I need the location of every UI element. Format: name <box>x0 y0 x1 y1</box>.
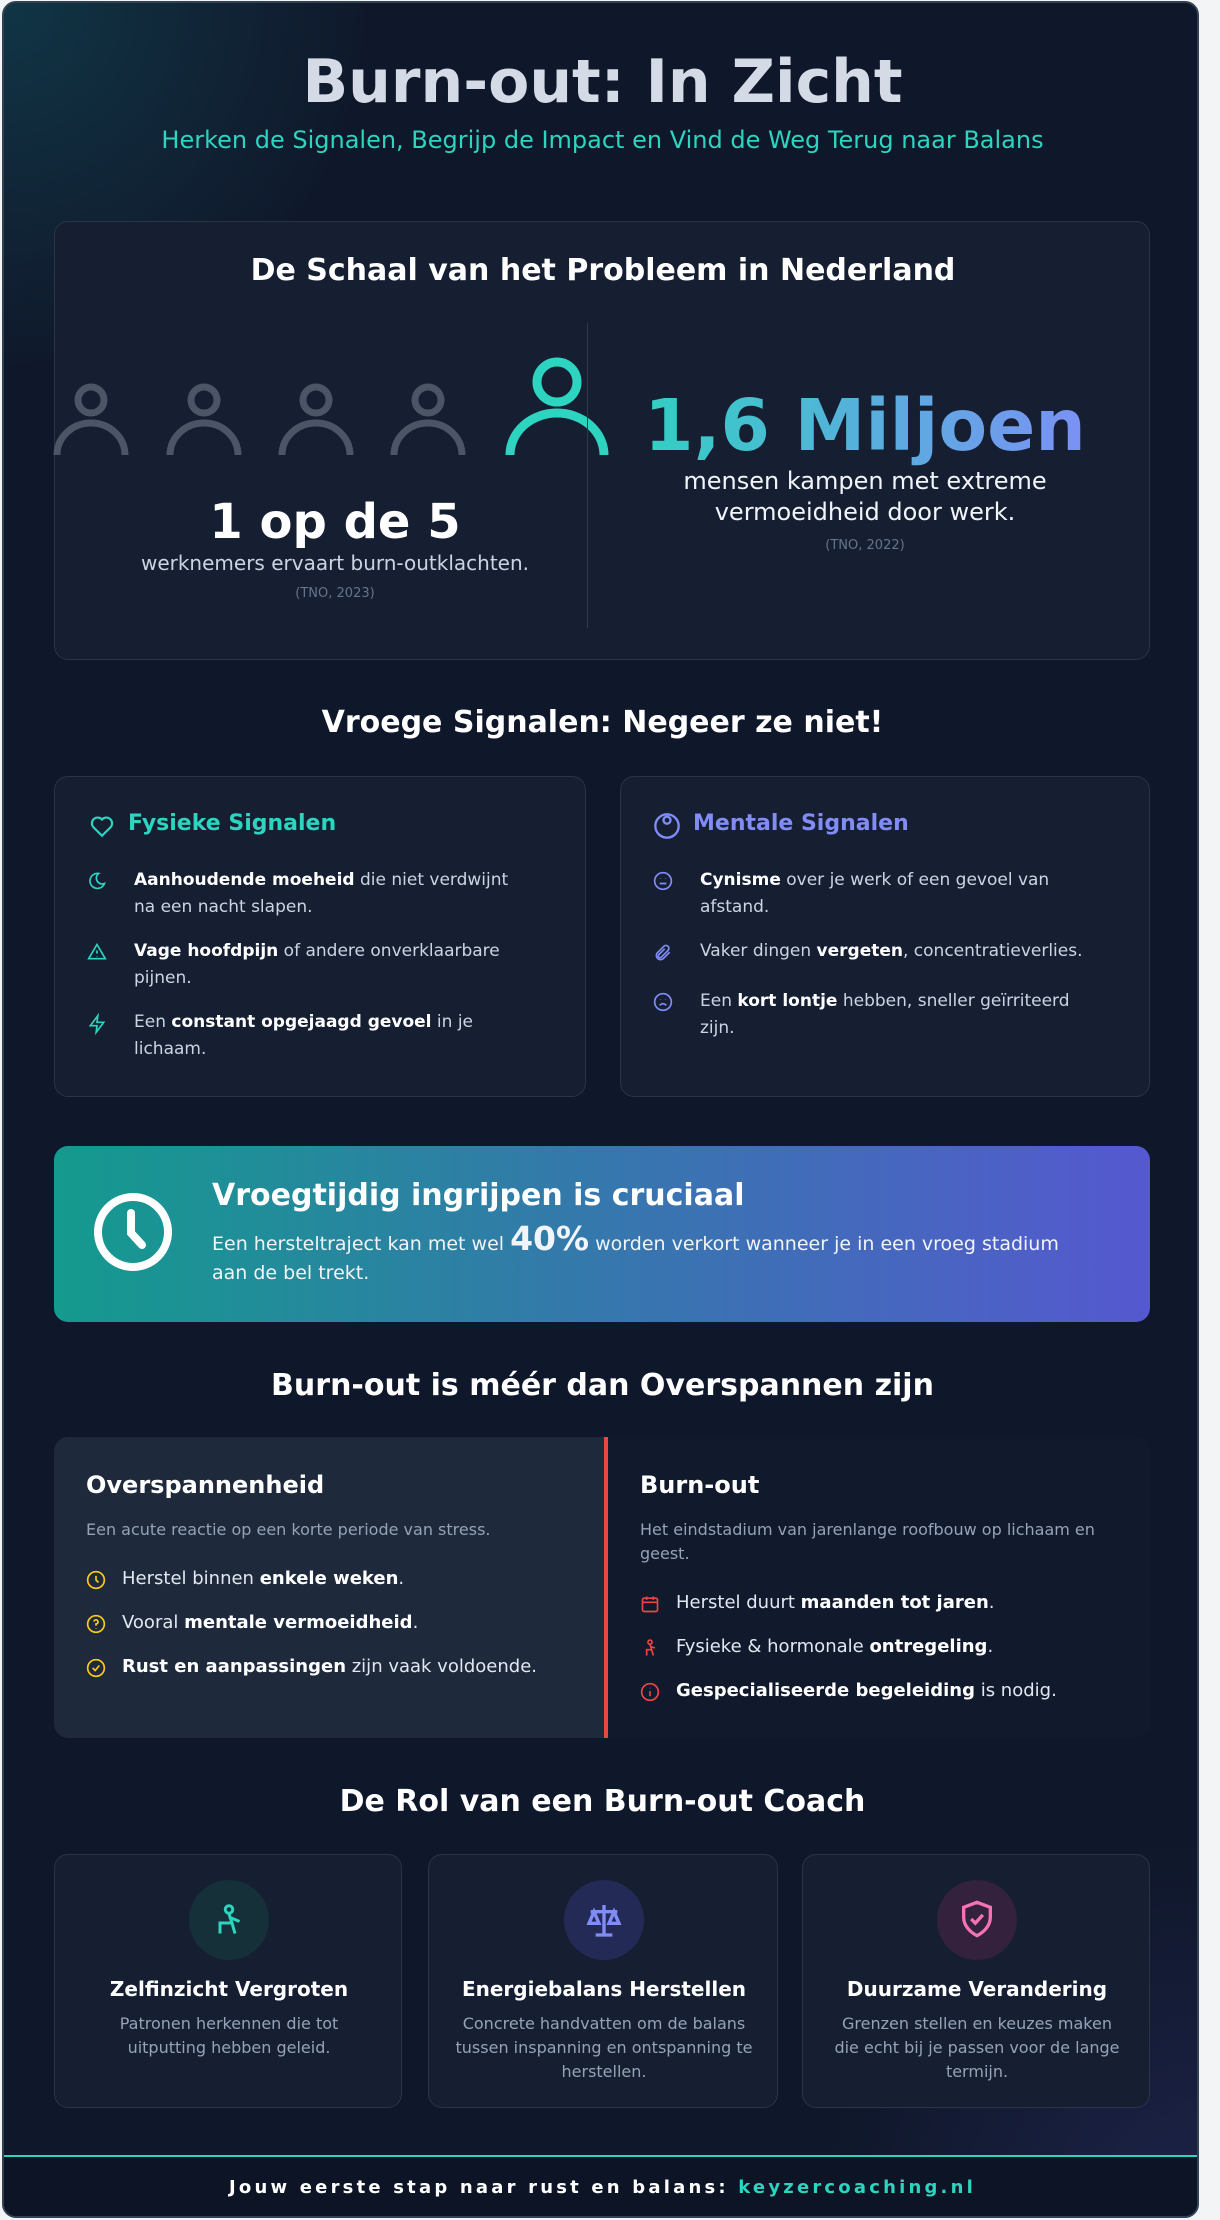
panel: fysieke signalen <box>54 776 586 1097</box>
header mentaal: Mentale Signalen <box>693 811 909 836</box>
stat: 1,6 Miljoen: vermoeidheid door werk. <box>715 498 1015 526</box>
footer <box>4 2155 1201 2220</box>
desc burn-out: Het eindstadium van jarenlange roofbouw op lichaam en geest. <box>640 1520 1095 1563</box>
stat: 1,6 Miljoen <box>644 384 1086 553</box>
item mentale: Vooral mentale vermoeidheid. <box>122 1612 418 1633</box>
stat: 1 op de 5 <box>141 494 529 601</box>
item vergeten: Vaker dingen vergeten, concentratieverlies. <box>700 941 1083 961</box>
icon: shield <box>937 1880 1017 1960</box>
banner text: Een hersteltraject kan met wel 40% worden verkort wanneer je in een vroeg stadium aan de bel trekt. <box>212 1219 1059 1284</box>
heading: vroege signalen: Vroege Signalen: Negeer ze niet! <box>322 705 883 740</box>
card: zelfinzicht <box>54 1854 402 2108</box>
item begeleiding: Gespecialiseerde begeleiding is nodig. <box>676 1680 1057 1701</box>
heading: scale: De Schaal van het Probleem in Nederland <box>251 253 955 288</box>
column: burn-out <box>640 1471 1095 1702</box>
item cynisme: Cynisme over je werk of een gevoel van afstand. <box>700 870 1049 917</box>
item rust: Rust en aanpassingen zijn vaak voldoende. <box>122 1656 537 1677</box>
banner: vroeg ingrijpen <box>54 1146 1150 1322</box>
title: Burn-out: In Zicht <box>302 47 903 117</box>
footer text: Jouw eerste stap naar rust en balans: keyzercoaching.nl <box>229 2177 976 2198</box>
title zelfinzicht: Zelfinzicht Vergroten <box>110 1977 348 2001</box>
desc zelfinzicht: Patronen herkennen die tot uitputting hebben geleid. <box>120 2014 338 2057</box>
desc energiebalans: Concrete handvatten om de balans tussen inspanning en ontspanning te herstellen. <box>456 2014 752 2081</box>
header fysiek: Fysieke Signalen <box>128 811 336 836</box>
people icons <box>54 358 608 455</box>
icon: person <box>189 1880 269 1960</box>
stat: 1 op de 5: werknemers ervaart burn-outklachten. <box>141 551 529 575</box>
divider <box>587 323 588 628</box>
title overspannenheid: Overspannenheid <box>86 1471 324 1499</box>
stat: 1 op de 5: 1 op de 5 <box>209 494 461 550</box>
subtitle: Herken de Signalen, Begrijp de Impact en Vind de Weg Terug naar Balans <box>161 126 1044 154</box>
desc duurzaam: Grenzen stellen en keuzes maken die echt bij je passen voor de lange termijn. <box>834 2014 1120 2081</box>
item weken: Herstel binnen enkele weken. <box>122 1568 404 1589</box>
item opgejaagd: Een constant opgejaagd gevoel in je lichaam. <box>134 1012 473 1059</box>
banner title: Vroegtijdig ingrijpen is cruciaal <box>212 1178 744 1213</box>
column: overspannenheid <box>54 1437 604 1738</box>
title duurzaam: Duurzame Verandering <box>847 1977 1107 2001</box>
stat: 1 op de 5: (TNO, 2023) <box>295 586 375 601</box>
panel: comparison <box>54 1437 1150 1738</box>
stat: 1,6 Miljoen: 1,6 Miljoen <box>644 384 1086 467</box>
stat: 1,6 Miljoen: mensen kampen met extreme <box>683 467 1047 495</box>
panel: mentale signalen <box>620 776 1150 1097</box>
item lontje: Een kort lontje hebben, sneller geïrriteerd zijn. <box>700 991 1070 1038</box>
card: energiebalans <box>428 1854 778 2108</box>
heading: burn-out vs overspannen: Burn-out is méér dan Overspannen zijn <box>271 1368 934 1403</box>
heading: coach role: De Rol van een Burn-out Coach <box>340 1784 865 1819</box>
item moeheid: Aanhoudende moeheid die niet verdwijnt na een nacht slapen. <box>134 870 508 917</box>
item ontregeling: Fysieke & hormonale ontregeling. <box>676 1636 993 1657</box>
title burn-out: Burn-out <box>640 1471 759 1499</box>
card: duurzame verandering <box>802 1854 1150 2108</box>
icon: scale <box>564 1880 644 1960</box>
title energiebalans: Energiebalans Herstellen <box>462 1977 746 2001</box>
desc overspannenheid: Een acute reactie op een korte periode van stress. <box>86 1520 490 1539</box>
red divider <box>604 1437 608 1738</box>
item maanden: Herstel duurt maanden tot jaren. <box>676 1592 995 1613</box>
icon: clock <box>94 1193 172 1271</box>
item hoofdpijn: Vage hoofdpijn of andere onverklaarbare pijnen. <box>134 941 500 988</box>
stat: 1,6 Miljoen: (TNO, 2022) <box>825 538 905 553</box>
panel: scale of problem <box>54 221 1150 660</box>
